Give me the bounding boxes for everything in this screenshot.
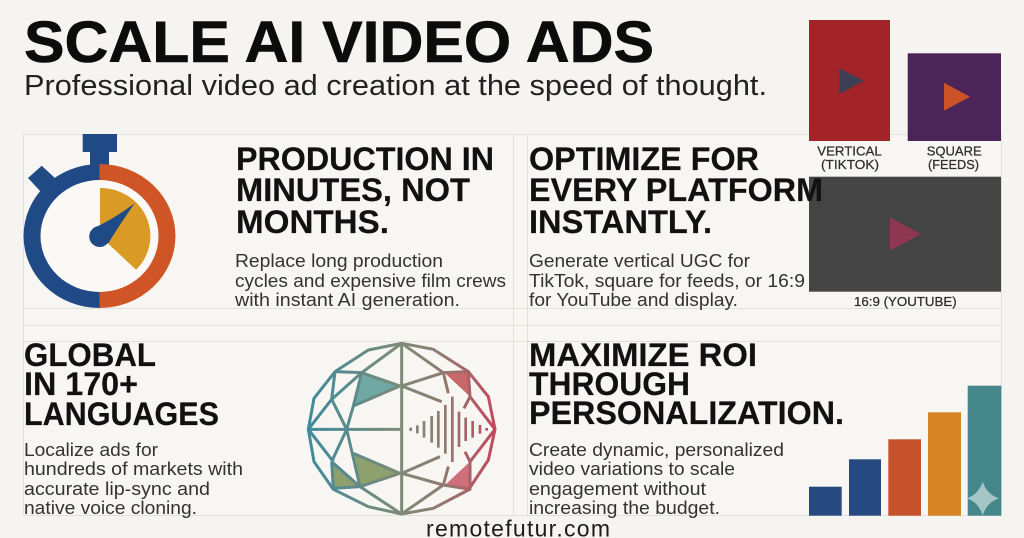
heading: global: IN 170+ — [24, 366, 138, 402]
text: maximize body — [529, 439, 784, 518]
icon: stopwatch — [24, 134, 175, 308]
text: maximize body: increasing the budget. — [529, 497, 720, 518]
text: maximize body: video variations to scale — [529, 458, 735, 479]
panel: production in minutes — [24, 134, 506, 310]
thumbnail: vertical tiktok: (TIKTOK) — [821, 157, 879, 172]
heading: maximize: THROUGH — [529, 366, 690, 402]
heading: global: LANGUAGES — [24, 396, 219, 432]
heading: production: MINUTES, NOT — [236, 172, 470, 208]
panel: maximize roi — [529, 337, 1001, 518]
bar chart: growth — [809, 386, 1001, 516]
heading: global: GLOBAL — [24, 337, 156, 373]
thumbnail: square feeds: (FEEDS) — [928, 157, 979, 172]
subtitle: Professional video ad creation at the speed of thought. — [24, 70, 767, 102]
text: optimize body: for YouTube and display. — [529, 289, 738, 310]
text: global body: native voice cloning. — [24, 497, 197, 518]
thumbnail: square feeds: SQUARE — [927, 144, 982, 159]
text: production body — [234, 250, 506, 310]
heading: optimize: INSTANTLY. — [529, 204, 712, 240]
text: optimize body — [529, 250, 805, 310]
heading: production: PRODUCTION IN — [236, 141, 494, 177]
thumbnail: square feeds — [908, 53, 1001, 172]
text: production body: with instant AI generation. — [234, 289, 460, 310]
text: global body — [24, 439, 243, 518]
thumbnail: 16:9 youtube: 16:9 (YOUTUBE) — [854, 294, 957, 309]
panel: global languages — [24, 337, 495, 518]
text: global body: accurate lip-sync and — [24, 478, 210, 499]
text: production body: cycles and expensive film crews — [235, 270, 506, 291]
thumbnail: vertical tiktok — [809, 20, 890, 172]
heading: global — [24, 337, 219, 432]
heading: optimize: OPTIMIZE FOR — [529, 141, 759, 177]
text: optimize body: Generate vertical UGC for — [529, 250, 750, 271]
heading: optimize — [529, 141, 823, 240]
text: optimize body: TikTok, square for feeds, or 16:9 — [529, 270, 805, 291]
text: production body: Replace long production — [235, 250, 443, 271]
heading: maximize: MAXIMIZE ROI — [529, 337, 757, 373]
heading: production: MONTHS. — [236, 204, 389, 240]
thumbnail: vertical tiktok: VERTICAL — [817, 144, 882, 159]
text: maximize body: Create dynamic, personalized — [529, 439, 784, 460]
icon: geodesic globe with sound wave — [308, 343, 495, 514]
title: SCALE AI VIDEO ADS — [24, 10, 654, 75]
thumbnail: 16:9 youtube — [809, 177, 1001, 309]
text: maximize body: engagement without — [529, 478, 706, 499]
heading: production — [236, 141, 494, 240]
heading: maximize: PERSONALIZATION. — [529, 395, 844, 431]
text: global body: Localize ads for — [24, 439, 158, 460]
heading: maximize — [529, 337, 844, 431]
panel: optimize for every platform — [529, 20, 1001, 310]
heading: optimize: EVERY PLATFORM — [529, 172, 823, 208]
text: global body: hundreds of markets with — [24, 458, 243, 479]
